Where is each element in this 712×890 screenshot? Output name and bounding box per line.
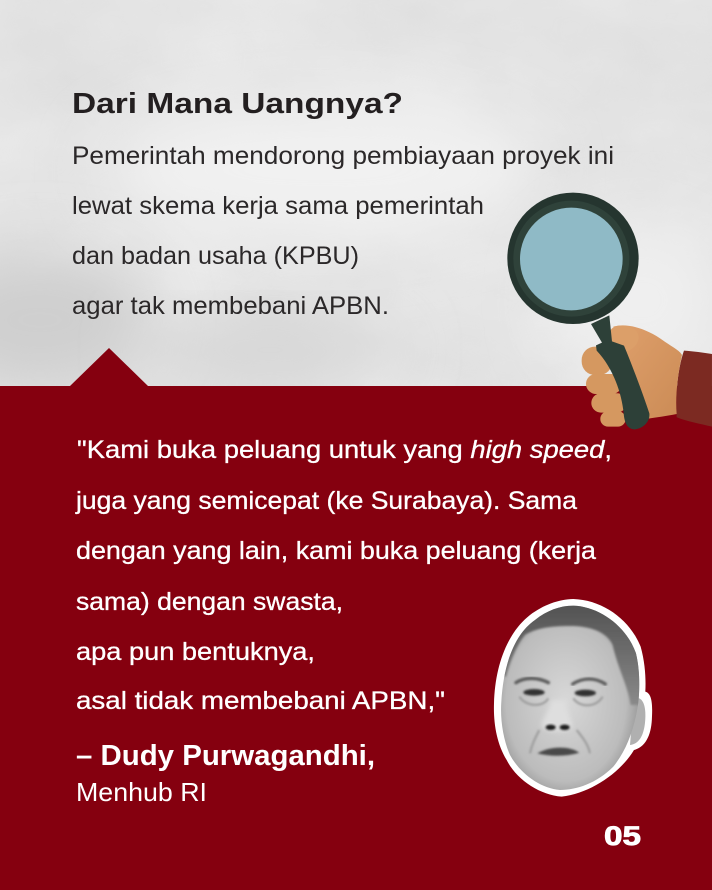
quote text block: "Kami buka peluang untuk yang high speed , <box>77 436 612 464</box>
fingers <box>582 347 627 427</box>
heading: Dari Mana Uangnya? <box>72 88 403 120</box>
intro text block: Pemerintah mendorong pembiayaan proyek ini <box>72 142 614 170</box>
face <box>501 606 639 790</box>
hair <box>504 606 640 706</box>
white sticker outline <box>494 599 652 797</box>
red lower panel with pointer <box>0 348 712 890</box>
eyes <box>523 689 596 696</box>
back of hand <box>613 325 682 419</box>
thumb <box>609 325 639 352</box>
eyebrows <box>516 678 605 684</box>
rim <box>507 193 639 324</box>
cloudy grey background <box>0 0 712 390</box>
portrait: speaker face cutout <box>494 599 652 797</box>
handle <box>591 315 649 429</box>
nose <box>542 700 572 731</box>
ear <box>630 698 645 745</box>
intro text block <box>72 142 614 320</box>
attribution: speaker name: – Dudy Purwagandhi, <box>76 740 375 772</box>
quote text block: dengan yang lain, kami buka peluang (kerja <box>76 537 596 565</box>
icon: hand holding magnifying glass <box>507 193 712 429</box>
intro text block: agar tak membebani APBN. <box>72 292 389 320</box>
intro text block: lewat skema kerja sama pemerintah <box>72 192 484 220</box>
quote text block <box>75 436 612 715</box>
intro text block: dan badan usaha (KPBU) <box>72 242 359 270</box>
quote text block: asal tidak membebani APBN," <box>76 687 445 715</box>
lens <box>520 208 623 310</box>
quote text block: juga yang semicepat (ke Surabaya). Sama <box>75 487 577 515</box>
quote text block: sama) dengan swasta, <box>76 588 343 616</box>
page number: 05 <box>604 821 641 851</box>
attribution: speaker role: Menhub RI <box>76 777 207 807</box>
mouth <box>537 748 579 756</box>
quote text block: apa pun bentuknya, <box>76 638 315 666</box>
sleeve <box>676 351 712 427</box>
under-eye shading <box>519 697 603 753</box>
